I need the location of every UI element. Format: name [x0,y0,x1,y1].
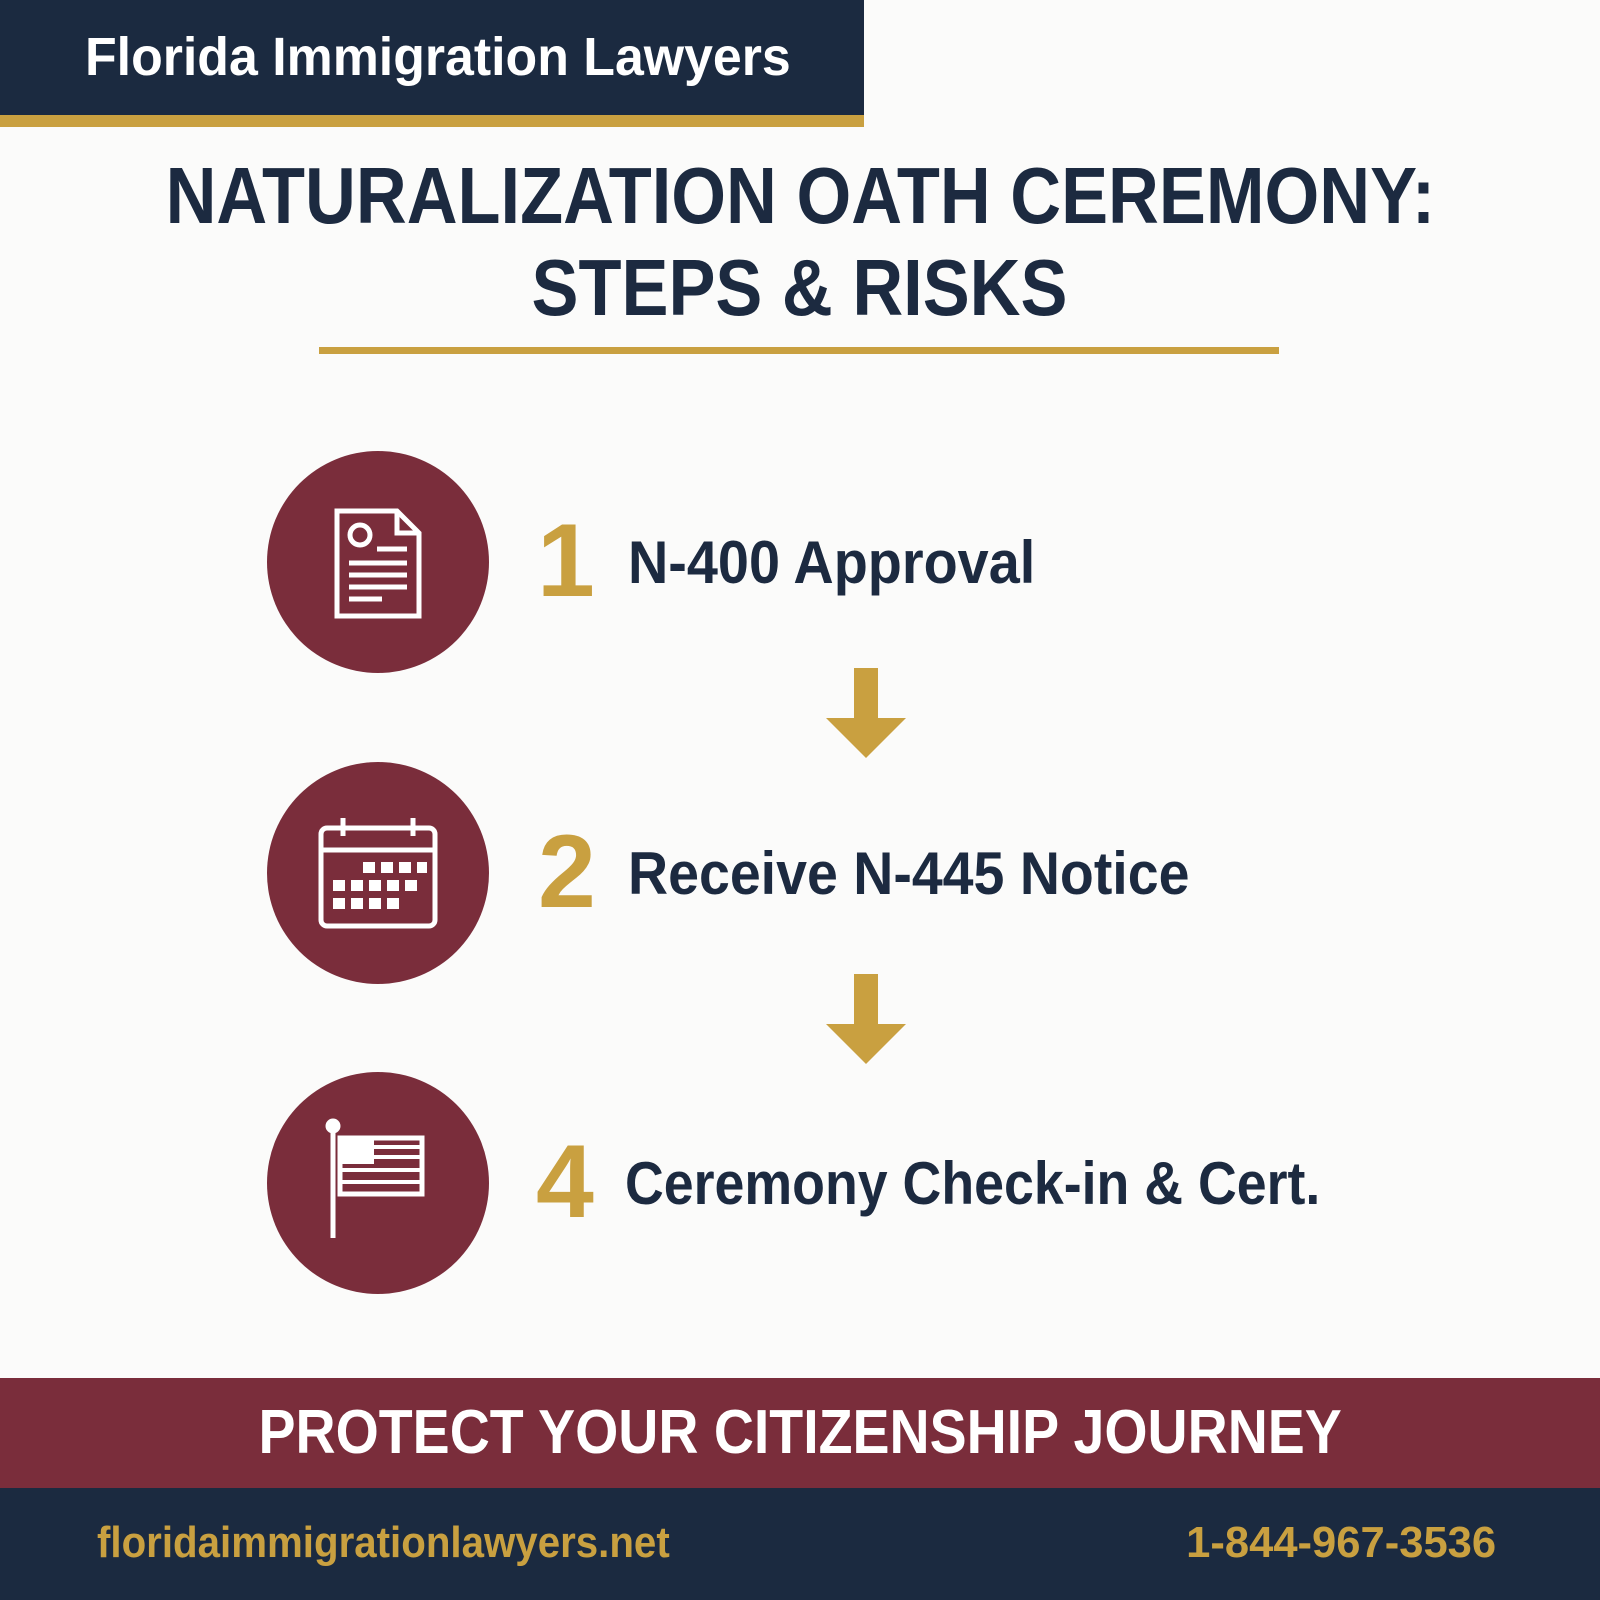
arrow 2 [826,974,906,1064]
number 1: 1 [537,503,595,619]
step 1 [267,451,1035,673]
footer [0,1488,1600,1600]
header text: Florida Immigration Lawyers [85,27,791,87]
icon: calendar [267,762,489,984]
arrow 1 [826,668,906,758]
icon: document [267,451,489,673]
title: STEPS & RISKS [532,243,1068,332]
title: NATURALIZATION OATH CEREMONY: [165,151,1435,240]
banner text: PROTECT YOUR CITIZENSHIP JOURNEY [258,1398,1342,1467]
icon: flag [267,1072,489,1294]
title underline [319,347,1279,354]
number 4: 4 [536,1124,594,1240]
bottom banner [0,1378,1600,1488]
label: Receive N-445 Notice [628,840,1189,907]
step 4 [267,1072,1320,1294]
step 2 [267,762,1189,984]
website: floridaimmigrationlawyers.net [97,1518,670,1567]
phone: 1-844-967-3536 [1186,1518,1496,1567]
title [165,151,1435,332]
label: N-400 Approval [628,529,1035,596]
label: Ceremony Check-in & Cert. [625,1150,1320,1217]
header bar [0,0,864,127]
number 2: 2 [538,814,596,930]
